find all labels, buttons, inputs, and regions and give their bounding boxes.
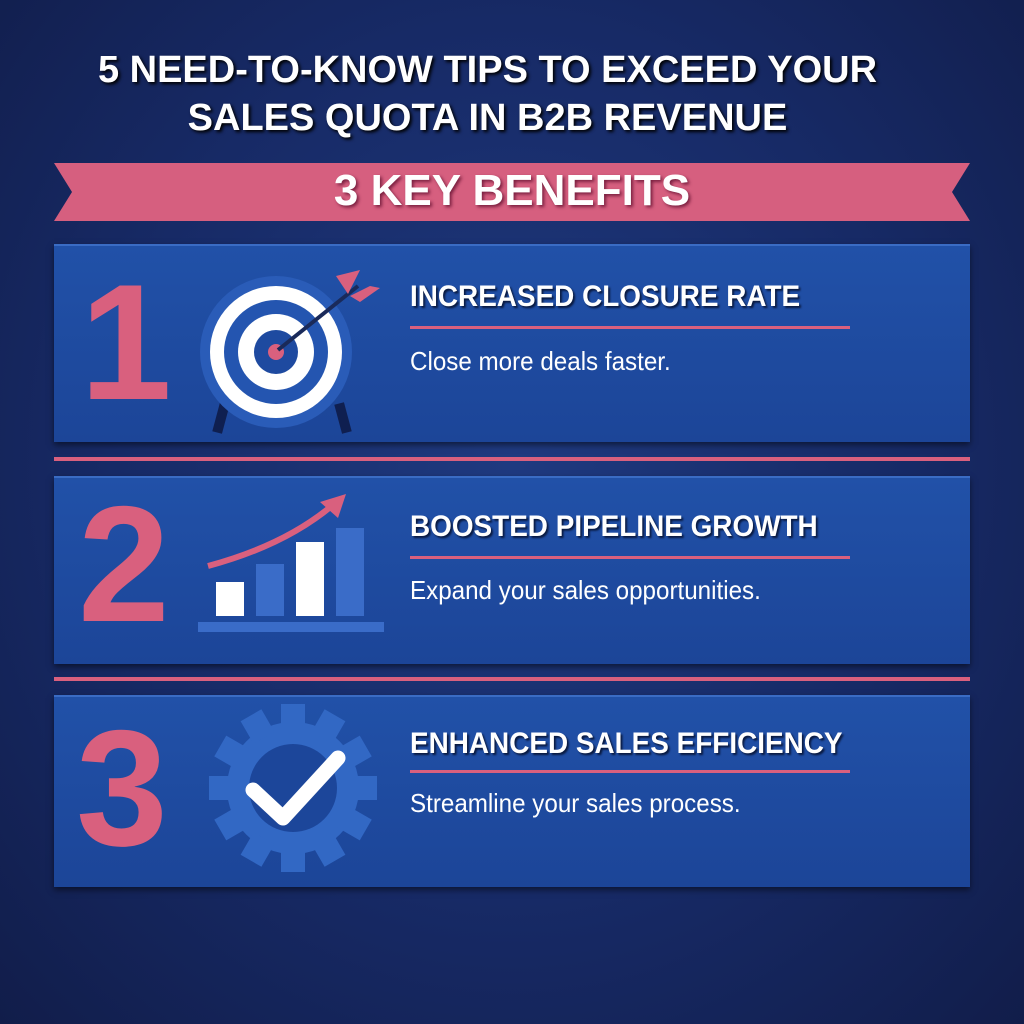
text 1: Close more deals faster. [410,346,671,376]
number 1: 1 [80,250,172,434]
panel 2 [54,476,970,664]
text 2: Expand your sales opportunities. [410,575,761,605]
number 3: 3 [76,696,168,880]
icon: gear check [209,704,377,872]
icon: bar chart [198,494,384,632]
number 2: 2 [78,472,170,656]
panel 3 [54,695,970,887]
panel 1 [54,244,970,442]
banner: 3 key benefits: 3 KEY BENEFITS [334,166,690,215]
heading 1: INCREASED CLOSURE RATE [410,280,800,313]
title: SALES QUOTA IN B2B REVENUE [188,97,787,139]
banner: 3 key benefits [54,163,970,221]
text 3: Streamline your sales process. [410,788,741,818]
icon: target [200,270,380,434]
title: 5 NEED-TO-KNOW TIPS TO EXCEED YOUR [98,49,877,91]
heading 2: BOOSTED PIPELINE GROWTH [410,510,818,543]
heading 3: ENHANCED SALES EFFICIENCY [410,727,842,760]
title [98,49,879,142]
